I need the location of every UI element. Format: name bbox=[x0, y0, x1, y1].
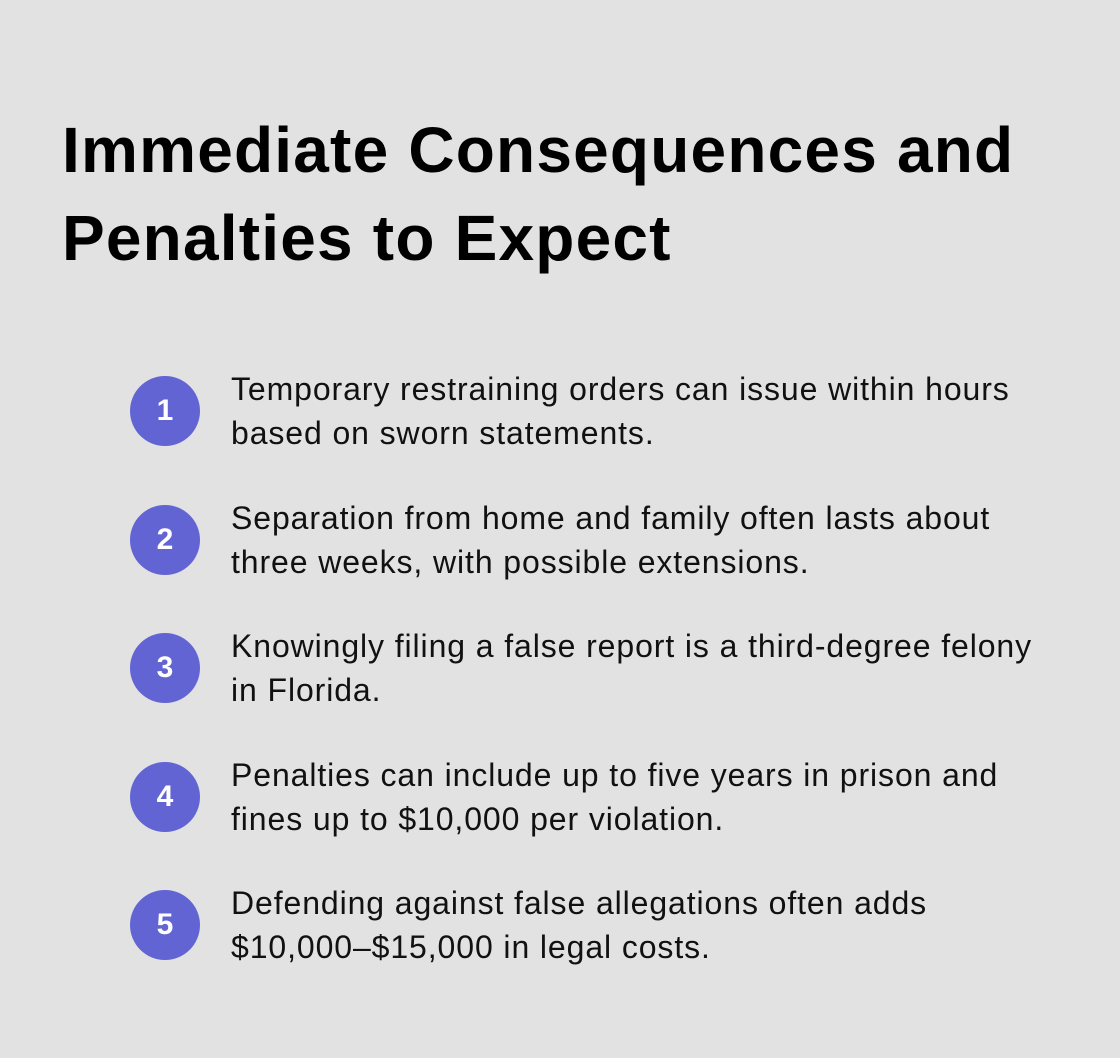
badge 5 bbox=[130, 890, 200, 960]
badge 2 bbox=[130, 505, 200, 575]
text 5: Defending against false allegations often adds bbox=[231, 885, 927, 921]
text 2: Separation from home and family often lasts about bbox=[231, 500, 990, 536]
item 5 bbox=[130, 885, 927, 965]
badge 4: 4 bbox=[157, 780, 173, 813]
text 1: based on sworn statements. bbox=[231, 415, 655, 451]
text 4: Penalties can include up to five years in prison and bbox=[231, 757, 998, 793]
item 2 bbox=[130, 500, 990, 580]
badge 4 bbox=[130, 762, 200, 832]
text 4 bbox=[231, 757, 998, 837]
badge 5: 5 bbox=[157, 908, 173, 941]
item 3 bbox=[130, 628, 1032, 708]
title: Immediate Consequences and bbox=[62, 114, 1014, 186]
badge 1 bbox=[130, 376, 200, 446]
item 4 bbox=[130, 757, 998, 837]
text 1 bbox=[231, 371, 1010, 451]
text 3: Knowingly filing a false report is a third-degree felony bbox=[231, 628, 1032, 664]
text 3: in Florida. bbox=[231, 672, 381, 708]
title: Penalties to Expect bbox=[62, 202, 672, 274]
badge 3: 3 bbox=[157, 651, 173, 684]
badge 3 bbox=[130, 633, 200, 703]
badge 1: 1 bbox=[157, 394, 173, 427]
text 3 bbox=[231, 628, 1032, 708]
title bbox=[62, 114, 1014, 274]
item 1 bbox=[130, 371, 1010, 451]
text 5 bbox=[231, 885, 927, 965]
text 2 bbox=[231, 500, 990, 580]
text 5: $10,000–$15,000 in legal costs. bbox=[231, 929, 711, 965]
text 2: three weeks, with possible extensions. bbox=[231, 544, 809, 580]
badge 2: 2 bbox=[157, 523, 173, 556]
text 1: Temporary restraining orders can issue within hours bbox=[231, 371, 1010, 407]
text 4: fines up to $10,000 per violation. bbox=[231, 801, 724, 837]
